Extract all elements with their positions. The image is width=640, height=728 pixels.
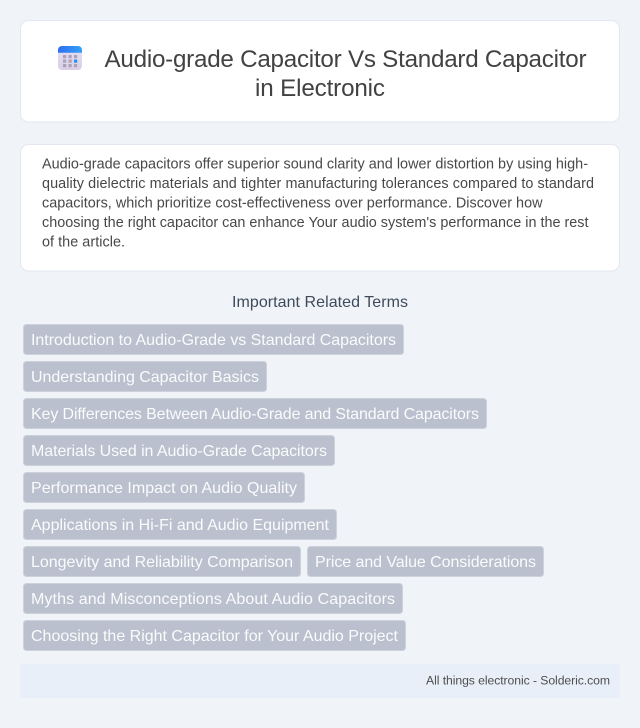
tag: key differences [24,398,486,428]
description text: capacitors, which prioritize cost-effectiveness over performance. Discover how [42,195,543,211]
tag: materials: Materials Used in Audio-Grade Capacitors [31,443,327,460]
tag: choosing: Choosing the Right Capacitor for Your Audio Project [31,628,399,645]
tag: introduction: Introduction to Audio-Grade vs Standard Capacitors [31,332,396,349]
tag: applications [24,510,336,540]
footer: All things electronic - Solderic.com [426,674,610,688]
description text: quality dielectric materials and tighter manufacturing tolerances compared to standard [42,176,594,192]
description text: choosing the right capacitor can enhance Your audio system's performance in the rest [42,215,588,231]
panel: related terms tags [24,324,544,650]
heading: important related terms: Important Related Terms [232,294,408,311]
tag: longevity: Longevity and Reliability Comparison [31,554,293,571]
tag: performance impact [24,472,304,502]
tag: performance impact: Performance Impact on Audio Quality [31,480,297,497]
title: Audio-grade Capacitor Vs Standard Capacitor [104,46,586,73]
tag: basics [24,362,266,392]
description text: of the article. [42,234,125,250]
description text: Audio-grade capacitors offer superior sound clarity and lower distortion by using high- [42,156,588,172]
tag: applications: Applications in Hi-Fi and Audio Equipment [31,517,330,534]
description text [42,156,594,250]
panel: title card [20,20,620,122]
icon: calendar [58,46,82,70]
tag: myths [24,584,402,614]
tag: myths: Myths and Misconceptions About Audio Capacitors [31,591,395,608]
tag: basics: Understanding Capacitor Basics [31,369,259,386]
tag: introduction [24,324,404,354]
footer [20,664,620,698]
tag: choosing [24,620,406,650]
tag: longevity [24,546,300,576]
title: in Electronic [255,75,385,102]
tag: materials [24,436,334,466]
panel: description card [20,144,620,271]
tag: key differences: Key Differences Between Audio-Grade and Standard Capacitors [31,406,479,423]
title [104,46,586,102]
tag: price and value [308,546,544,576]
tag: price and value: Price and Value Considerations [315,554,536,571]
